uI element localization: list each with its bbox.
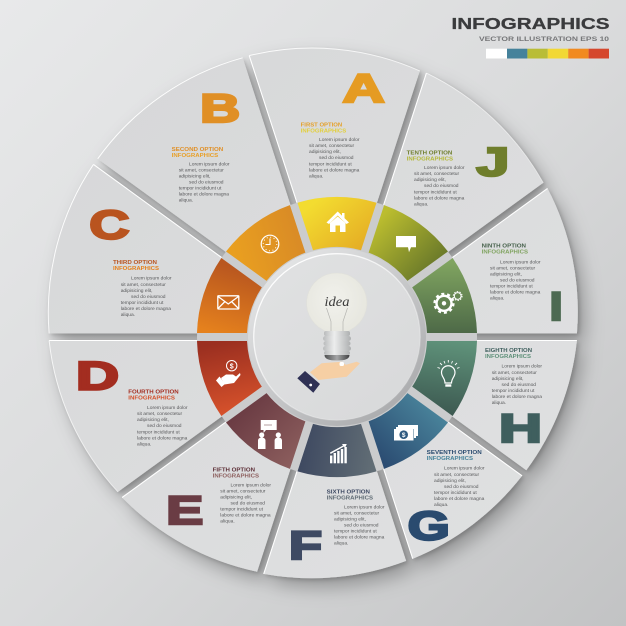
icon: gears [435,292,462,313]
text block J: INFOGRAPHICS [407,156,453,162]
text block G: SEVENTH OPTION [427,450,482,456]
text block D: INFOGRAPHICS [128,396,175,402]
text block B: labore et dolore magna [179,192,229,198]
text block F: sit amet, consectetur [334,510,379,516]
text block H [485,348,542,406]
text block C: INFOGRAPHICS [113,266,159,272]
text block H: labore et dolore magna [492,394,542,400]
text block D: tempor incididunt ut [137,429,180,435]
text block J: TENTH OPTION [407,150,452,156]
text block F: labore et dolore magna [334,535,385,541]
text block B: INFOGRAPHICS [172,153,219,159]
text block B: SECOND OPTION [172,147,223,153]
palm [310,362,360,380]
text block J: tempor incididunt ut [414,189,457,195]
text block J [407,150,465,207]
text block H: Lorem ipsum dolor [502,364,542,370]
text block J: adipisicing elit, [414,177,446,183]
text block F: aliqua. [334,541,348,547]
icon: speech bubble [396,236,416,252]
icon: envelope [218,296,239,309]
text block C: tempor incididunt ut [121,300,164,306]
text block F: tempor incididunt ut [334,529,377,535]
cuff [297,371,320,393]
text block H: sit amet, consectetur [492,370,537,376]
sector B [98,58,303,275]
letter D: D [76,354,119,398]
outer sectors [48,48,578,578]
segment D red [197,341,262,416]
text block G: adipisicing elit, [434,478,466,484]
text block A [301,122,360,179]
text block I: INFOGRAPHICS [482,249,528,255]
sector G [371,399,522,559]
text block C: Lorem ipsum dolor [131,276,172,282]
big letters [76,67,563,568]
subtitle: VECTOR ILLUSTRATION EPS 10 [479,36,610,43]
text block J: labore et dolore magna [414,195,465,201]
segment I green [412,258,477,333]
segment E maroon [226,393,305,469]
text block E: FIFTH OPTION [213,468,255,474]
text block I: NINTH OPTION [482,243,526,249]
text block E: sit amet, consectetur [220,488,266,494]
light bulb with idea [307,273,367,360]
text block H: sed do eiusmod [502,382,536,388]
text block A: aliqua. [309,173,323,179]
centre hub [248,248,426,426]
text block E: sed do eiusmod [230,500,265,506]
fingernail [340,362,344,366]
text block E [213,468,271,525]
text block D: adipisicing elit, [137,417,169,423]
title block [452,16,610,58]
text block B: aliqua. [179,198,193,204]
text block G: sit amet, consectetur [434,472,479,478]
colour legend bar [486,49,609,58]
text block F: SIXTH OPTION [327,489,370,495]
segment H teal [412,341,477,416]
icon: home [326,212,349,232]
text block H: EIGHTH OPTION [485,348,532,354]
coloured ring [197,197,477,477]
text block D: sed do eiusmod [147,423,182,429]
segment J olive [369,205,448,281]
text block B: sed do eiusmod [189,180,224,186]
segment G blue [369,393,448,469]
text block D: aliqua. [137,441,151,447]
segment F slate [298,424,376,477]
text block A: sit amet, consectetur [309,143,354,149]
text block I: Lorem ipsum dolor [500,259,541,265]
text block I: sed do eiusmod [500,278,535,284]
letter A: A [343,67,385,111]
text block I: aliqua. [490,296,504,302]
text block F: sed do eiusmod [344,522,379,528]
text block J: Lorem ipsum dolor [424,165,465,171]
text block G: labore et dolore magna [434,496,485,502]
idea label: idea [324,294,350,309]
icon: hand with coin: $ [230,363,234,370]
text block C [113,260,172,318]
icon: banknotes [394,425,418,440]
text block G [427,450,485,508]
text block J: aliqua. [414,201,428,207]
sector I [420,188,578,334]
text block B: sit amet, consectetur [179,167,224,173]
text block G: tempor incididunt ut [434,490,477,496]
text block E: tempor incididunt ut [220,507,264,513]
text block A: sed do eiusmod [319,155,354,161]
sector J [371,73,543,275]
icon: hand with coin [216,360,240,387]
text block H: INFOGRAPHICS [485,354,531,360]
text block J: sit amet, consectetur [414,171,459,177]
text block E: Lorem ipsum dolor [230,482,271,488]
text block I [482,243,541,302]
sector F [264,433,406,578]
letter E: E [166,489,203,533]
text block B: adipisicing elit, [179,173,211,179]
icon: bar chart with arrow [330,444,347,463]
icon: people with speech bubble [258,420,282,449]
text block B: Lorem ipsum dolor [189,161,230,167]
text block I: sit amet, consectetur [490,265,535,271]
text block C: labore et dolore magna [121,306,171,312]
text block B: tempor incididunt ut [179,186,222,192]
filament [326,308,348,335]
icon: clock [261,235,279,253]
text block G: Lorem ipsum dolor [444,466,485,472]
segment B orange [226,205,305,281]
text block E: adipisicing elit, [220,494,252,500]
sector H [420,340,577,470]
text block A: labore et dolore magna [309,167,360,173]
text block F: Lorem ipsum dolor [344,504,385,510]
text block F: adipisicing elit, [334,516,366,522]
letter B: B [200,87,240,131]
bulb glass [307,273,367,340]
title: INFOGRAPHICS [452,16,610,33]
text block G: INFOGRAPHICS [427,456,473,462]
letter C: C [89,204,129,248]
letter I: I [550,285,563,329]
text block E: INFOGRAPHICS [213,474,259,480]
text block C: THIRD OPTION [113,260,157,266]
text block J: sed do eiusmod [424,183,459,189]
text block D [128,390,188,447]
text block A: adipisicing elit, [309,149,341,155]
text block F: INFOGRAPHICS [327,495,373,501]
text block A: tempor incididunt ut [309,161,352,167]
text block E: labore et dolore magna [220,513,271,519]
text block H: tempor incididunt ut [492,388,535,394]
text block F [327,489,385,547]
letter F: F [289,524,322,568]
text block C: sed do eiusmod [131,294,166,300]
text block D: labore et dolore magna [137,435,188,441]
sector C [48,164,254,334]
text block E: aliqua. [220,519,235,525]
ring backing [197,197,477,477]
text block A: INFOGRAPHICS [301,128,347,134]
letter G: G [408,504,450,548]
text block A: FIRST OPTION [301,122,342,128]
letter J: J [476,140,509,184]
text block I: tempor incididunt ut [490,284,533,290]
sector D [49,340,254,492]
text block C: sit amet, consectetur [121,282,166,288]
screw base [323,331,351,355]
text block G: sed do eiusmod [444,484,479,490]
text block A: Lorem ipsum dolor [319,137,360,143]
text block G: aliqua. [434,502,448,508]
text block H: aliqua. [492,400,506,406]
sector E [122,399,303,572]
text block C: adipisicing elit, [121,288,153,294]
text block B [172,147,230,204]
text block I: adipisicing elit, [490,271,522,277]
text block H: adipisicing elit, [492,376,524,382]
sector A [249,48,420,241]
hand holding bulb [297,362,360,393]
segment A yellow [298,197,376,250]
text block D: FOURTH OPTION [128,390,179,396]
text block I: labore et dolore magna [490,290,541,296]
cuff button [309,384,312,386]
icon: banknotes: $ [402,432,406,439]
bulb cap [324,355,350,360]
segment C dark orange [197,258,262,333]
letter H: H [499,407,542,451]
text block C: aliqua. [121,312,135,318]
text block D: Lorem ipsum dolor [147,405,188,411]
text block D: sit amet, consectetur [137,411,182,417]
icon: light bulb [438,360,460,386]
